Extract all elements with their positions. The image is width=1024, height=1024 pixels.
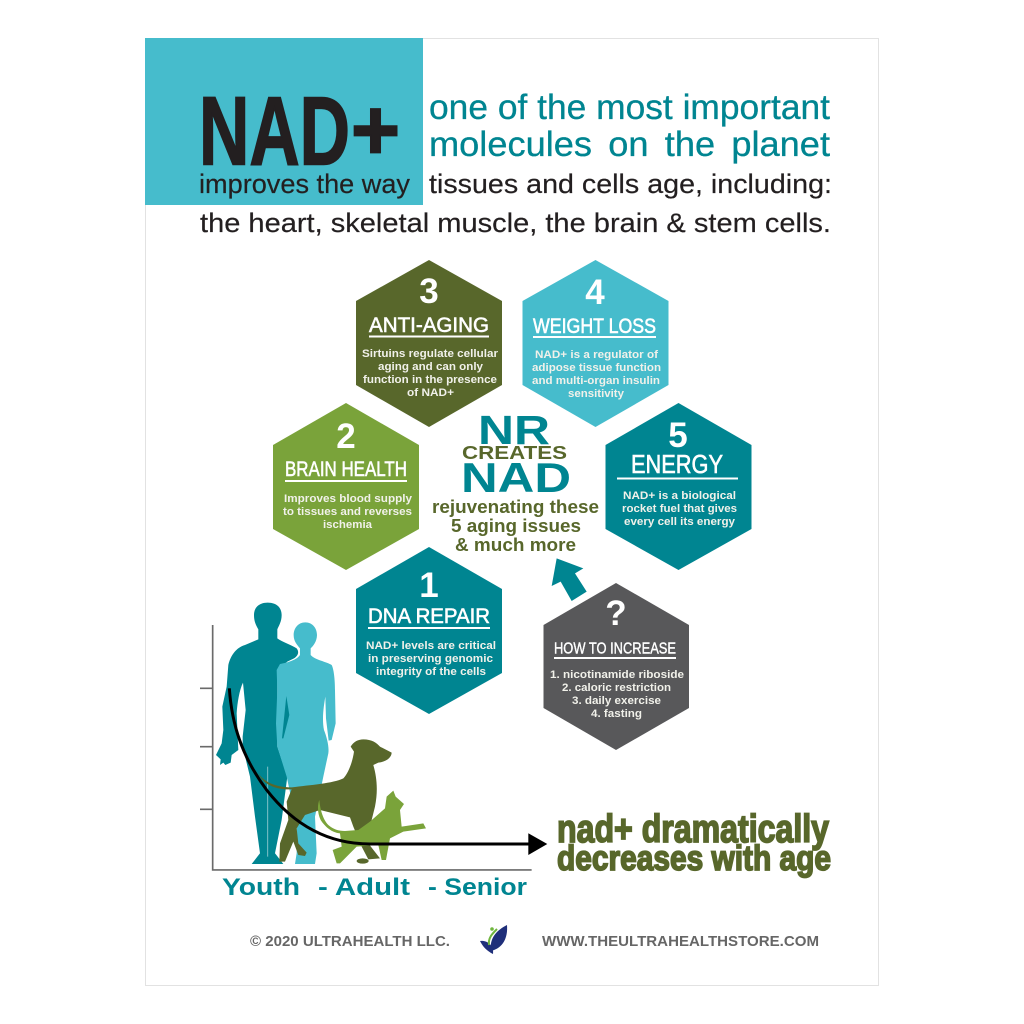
- icon: leaf logo: [480, 925, 507, 954]
- callout: nad+ decreases with age: nad+ dramatically: [557, 808, 829, 851]
- hexagon 4: weight loss: [522, 260, 668, 427]
- hexagon 1: DNA repair: 1: [419, 566, 439, 605]
- hexagon 5: energy: 5: [668, 416, 688, 455]
- hexagon 1: DNA repair: DNA REPAIR: [368, 605, 490, 628]
- title: NAD+: NAD: [199, 76, 350, 186]
- subheading: improves the way tissues and cells age: the heart, skeletal muscle, the brain & stem cells.: [200, 208, 831, 238]
- hexagon 4: weight loss: adipose tissue function: [532, 362, 661, 374]
- hexagon ?: how to increase: [544, 583, 689, 750]
- headline: most important molecules: molecules on the planet: [429, 125, 830, 164]
- subheading: improves the way tissues and cells age: [199, 169, 832, 238]
- hexagon 1: DNA repair: in preserving genomic: [368, 653, 493, 665]
- hexagon 3: anti-aging: Sirtuins regulate cellular: [362, 348, 498, 360]
- hexagon 3: anti-aging: of NAD+: [407, 387, 454, 399]
- hexagon 4: weight loss: 4: [585, 273, 605, 312]
- callout: nad+ decreases with age: decreases with age: [557, 839, 831, 878]
- hexagon 5: energy: rocket fuel that gives: [622, 503, 737, 515]
- hexagon 4: weight loss: NAD+ is a regulator of: [535, 349, 659, 361]
- chart axes: [200, 625, 532, 870]
- hexagon 3: anti-aging: [356, 260, 502, 427]
- subheading: improves the way tissues and cells age: tissues and cells age, including:: [429, 169, 832, 199]
- hexagon 3: anti-aging: ANTI-AGING: [369, 314, 489, 337]
- hexagon 2: brain health: to tissues and reverses: [283, 506, 412, 518]
- hexagon ?: how to increase: 2. caloric restriction: [562, 682, 671, 694]
- axis label: age stages: - Adult: [318, 874, 410, 901]
- hexagon 2: brain health: [273, 403, 419, 570]
- hexagon 4: weight loss: sensitivity: [568, 388, 624, 400]
- hexagon 4: weight loss: and multi-organ insulin: [532, 375, 660, 387]
- center message: NR creates NAD: & much more: [455, 535, 576, 555]
- hexagon 2: brain health: ischemia: [323, 519, 372, 531]
- hexagon ?: how to increase: 4. fasting: [591, 708, 642, 720]
- axis label: age stages: Youth: [222, 874, 300, 901]
- hexagon 3: anti-aging: aging and can only: [378, 361, 483, 373]
- hexagon 5: energy: NAD+ is a biological: [623, 490, 736, 502]
- hexagon 2: brain health: 2: [336, 417, 356, 456]
- hexagon ?: how to increase: 3. daily exercise: [572, 695, 661, 707]
- subheading: improves the way tissues and cells age: improves the way: [199, 169, 410, 199]
- silhouette: cat: [318, 791, 426, 864]
- hexagon 2: brain health: BRAIN HEALTH: [285, 458, 407, 481]
- chart: NAD decline with age: [200, 603, 547, 870]
- center message: NR creates NAD: [432, 407, 599, 555]
- hexagon 3: anti-aging: 3: [419, 272, 439, 311]
- hexagon 5: energy: every cell its energy: [624, 516, 735, 528]
- hexagon 1: DNA repair: integrity of the cells: [376, 666, 486, 678]
- callout: nad+ decreases with age: [557, 808, 831, 878]
- hexagon ?: how to increase: 1. nicotinamide riboside: [550, 669, 684, 681]
- title: NAD+: +: [351, 83, 400, 178]
- curve: NAD level decline: [229, 688, 547, 855]
- hexagon 4: weight loss: WEIGHT LOSS: [533, 315, 656, 338]
- footer: website: WWW.THEULTRAHEALTHSTORE.COM: [542, 933, 819, 950]
- axis label: age stages: [222, 874, 527, 901]
- hexagon 1: DNA repair: [356, 547, 502, 714]
- silhouette: woman: [276, 622, 336, 864]
- hexagon ?: how to increase: HOW TO INCREASE: [554, 640, 676, 658]
- silhouette: man: [216, 603, 298, 864]
- headline: most important molecules: one of the most important: [429, 88, 830, 127]
- center message: NR creates NAD: NAD: [461, 454, 571, 501]
- hexagon 5: energy: [606, 403, 752, 570]
- footer: copyright: © 2020 ULTRAHEALTH LLC.: [250, 934, 450, 950]
- hexagon 1: DNA repair: NAD+ levels are critical: [366, 640, 496, 652]
- hexagon 3: anti-aging: function in the presence: [363, 374, 497, 386]
- center message: NR creates NAD: rejuvenating these: [432, 497, 599, 517]
- hexagon 5: energy: ENERGY: [631, 449, 723, 479]
- silhouette: dog: [258, 739, 392, 862]
- axis label: age stages: - Senior: [428, 874, 527, 901]
- center message: NR creates NAD: NR: [478, 407, 550, 453]
- header teal block: [145, 38, 423, 205]
- hexagon ?: how to increase: ?: [605, 594, 627, 633]
- headline: most important molecules: [429, 88, 830, 164]
- center message: NR creates NAD: 5 aging issues: [451, 516, 581, 536]
- center message: NR creates NAD: CREATES: [462, 443, 567, 463]
- hexagon 2: brain health: Improves blood supply: [284, 493, 412, 505]
- arrow: up to center message: [552, 558, 587, 601]
